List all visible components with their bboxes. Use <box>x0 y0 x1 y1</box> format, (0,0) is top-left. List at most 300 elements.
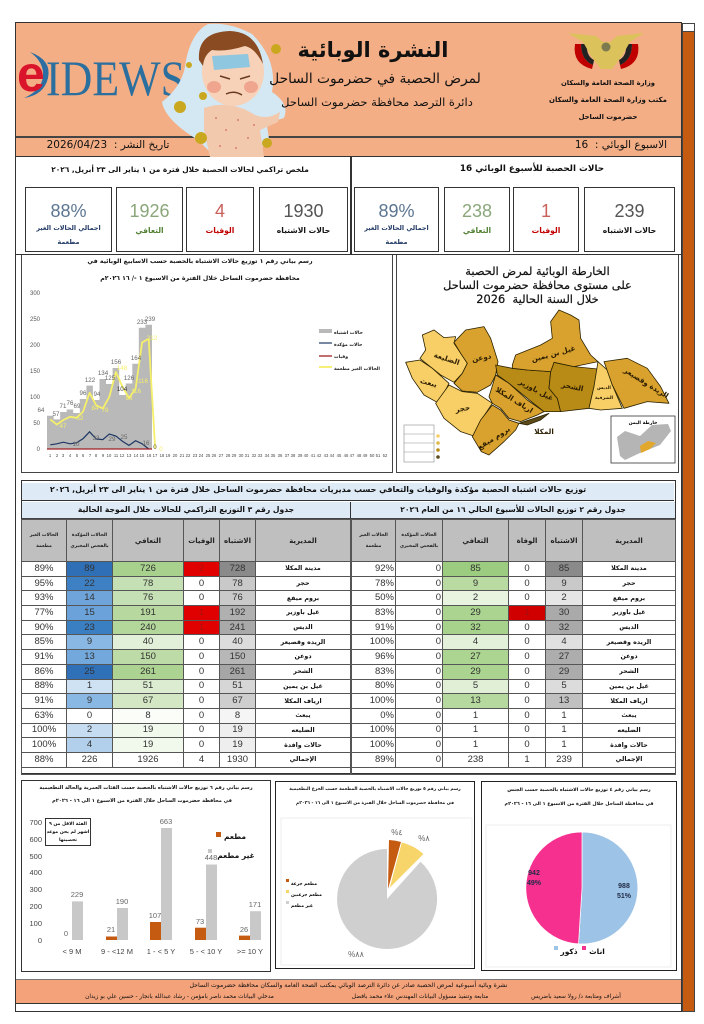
map district labels: غيل بن يمين <box>530 343 577 364</box>
card: cumulative recovered: التعافي <box>135 226 164 235</box>
chart 1 heading line 2: محافظة حضرموت الساحل خلال الفترة من الاسبوع ١ -/ ١٦ ٢٠٢٦م <box>100 275 300 282</box>
table: current week by district: 5 <box>561 680 567 691</box>
line and area chart: 45 <box>337 453 342 458</box>
chart 5 legend: غير مطعم <box>291 904 313 909</box>
table section title <box>22 483 674 501</box>
table: current week by district: 1 <box>561 710 567 721</box>
line and area chart: 71 <box>60 403 67 410</box>
inset map: Yemen <box>610 416 676 464</box>
illustration: sick child <box>162 24 286 157</box>
table: cumulative by district: 93% <box>34 592 54 603</box>
line and area chart: 51 <box>376 453 381 458</box>
table: current week by district: 4 <box>473 636 478 647</box>
table: cumulative by district: 40 <box>232 636 243 647</box>
card: cumulative deaths: 4 <box>215 201 225 221</box>
pie chart: vaccination doses: %٨ <box>418 834 430 843</box>
pie chart: vaccination doses: %٨٨ <box>348 950 365 959</box>
table: current week by district <box>351 519 676 775</box>
chart 6 heading line 1: رسم بياني رقم ٦ توزيع حالات الاشتباه بالحصبة حسب الفئات العمرية والحالة التطعيمية <box>39 785 253 791</box>
table: current week by district: 0 <box>524 666 530 677</box>
line and area chart: 10 <box>107 453 112 458</box>
table: current week by district: 0 <box>524 710 530 721</box>
table: current week by district: الريده وقصيعر <box>607 639 651 646</box>
table: cumulative by district: 4 <box>199 754 204 765</box>
line and area chart: 126 <box>124 375 135 382</box>
table: current week by district: 92% <box>375 563 394 574</box>
map district labels: الديس <box>597 386 611 391</box>
line and area chart: 48 <box>357 453 362 458</box>
card: weekly recovered: التعافي <box>463 226 491 235</box>
legend label unvaccinated: غير مطعم <box>217 851 255 860</box>
bar chart: age groups: 300 <box>29 885 42 894</box>
table: current week by district: 0 <box>436 724 441 735</box>
table: cumulative by district: 15 <box>84 607 95 618</box>
department line: دائرة الترصد محافظة حضرموت الساحل <box>281 95 473 109</box>
table: current week by district: 78% <box>375 578 394 589</box>
divider between summaries <box>350 157 352 255</box>
table: cumulative by district: 78 <box>232 578 243 589</box>
table: current week by district: الوفاة <box>517 536 537 544</box>
bar chart: age groups: 700 <box>29 818 42 827</box>
ministry line 2: مكتب وزارة الصحة العامة والسكان <box>549 96 667 104</box>
table: cumulative by district: 150 <box>230 651 245 662</box>
map legend <box>404 424 440 462</box>
pie chart: gender: 988 <box>618 883 630 890</box>
map district labels: دوعن <box>471 351 492 364</box>
table: current week by district: التعافي <box>462 536 489 544</box>
pie chart: gender: 51% <box>617 893 632 900</box>
table: cumulative by district: 0 <box>199 710 204 721</box>
table: current week by district: 32 <box>470 622 481 633</box>
table: cumulative by district: 8 <box>235 710 240 721</box>
map district labels: المكلا <box>534 427 554 436</box>
bar chart: age groups: 26 <box>240 925 248 934</box>
line and area chart: 17 <box>153 453 158 458</box>
line and area chart: 2 <box>56 453 59 458</box>
card: cumulative recovered <box>116 187 183 252</box>
line and area chart: 200 <box>30 343 41 349</box>
legend swatch unvaccinated <box>208 849 212 853</box>
legend swatch female <box>582 946 586 950</box>
table: cumulative by district: 0 <box>199 636 204 647</box>
table: cumulative by district: 8 <box>145 710 151 721</box>
line and area chart: 33 <box>258 453 263 458</box>
table: current week by district: مدينة المكلا <box>611 565 647 572</box>
map district labels: الريدة وقصيعر <box>621 365 670 400</box>
table: current week by district: 4 <box>561 636 567 647</box>
bar chart: age groups: 400 <box>29 868 42 877</box>
weekly summary heading: حالات الحصبة للأسبوع الوبائي 16 <box>460 164 604 174</box>
table: current week by district: 0 <box>524 592 530 603</box>
table: current week by district: المديرية <box>615 536 643 544</box>
line and area chart: 38 <box>291 453 296 458</box>
table: cumulative by district: 51 <box>143 680 153 691</box>
table: cumulative by district: 226 <box>82 754 97 765</box>
map panel <box>396 255 679 473</box>
table: cumulative by district: 19 <box>143 724 153 735</box>
table: current week by district: 1 <box>473 739 478 750</box>
bar chart: age groups: 73 <box>196 917 204 926</box>
table: cumulative by district: 89% <box>34 563 54 574</box>
pie chart: vaccination doses: %٤ <box>391 828 403 837</box>
line and area chart: 69 <box>74 403 81 410</box>
line and area chart: 52 <box>383 453 388 458</box>
table: cumulative by district: 0 <box>199 578 204 589</box>
table: cumulative by district: 0 <box>199 739 204 750</box>
card: weekly deaths <box>513 187 579 252</box>
chart 6 panel: age and vaccination <box>21 780 271 972</box>
line and area chart: 28 <box>226 453 231 458</box>
table: current week by district: 0 <box>524 651 530 662</box>
line and area chart: 78 <box>102 407 109 414</box>
map district labels: حجر <box>453 403 471 414</box>
card: weekly unvaccinated: 89% <box>378 201 415 221</box>
line and area chart: 19 <box>166 453 171 458</box>
table: cumulative by district: 91% <box>34 695 54 706</box>
chart 1 legend: وفيات <box>334 355 348 360</box>
line and area chart: 32 <box>252 453 257 458</box>
line and area chart: 134 <box>98 370 109 377</box>
footer line 1: نشرة وبائية أسبوعية لمرض الحصبة صادر عن دائرة الترصد الوبائي بمكتب الصحة العامة والسكان محافظة حضرموت الساحل <box>189 982 508 989</box>
table: current week by district: 32 <box>559 622 569 633</box>
table: cumulative by district: غيل باوزير <box>286 609 320 616</box>
table 3 caption: جدول رقم ٣ التوزيع التراكمي للحالات خلال الموجة الحالية <box>78 505 294 514</box>
footer credit: data entry: مدخلي البيانات محمد ناصر بامؤمن - رشاد عبدالله بانجار - حسين علي بو زيدان <box>85 994 274 1000</box>
table: current week by district: الضليعه <box>617 727 641 734</box>
table: cumulative by district: 23 <box>84 622 95 633</box>
chart 1 legend: حالات اشتباه <box>334 331 363 336</box>
map district labels: الشحر <box>560 380 584 393</box>
table: cumulative by district: 88% <box>34 680 54 691</box>
line and area chart: 36 <box>278 453 283 458</box>
line and area chart: 18 <box>160 453 165 458</box>
table: current week by district: 1 <box>524 607 530 618</box>
table: cumulative by district <box>21 519 351 775</box>
legend label male: ذكور <box>560 947 578 956</box>
table: current week by district: 96% <box>375 651 394 662</box>
note text: الفئة الاقل من ٩ اشهر لم يحن موعد تحصينها <box>47 822 89 843</box>
table: current week by district: 83% <box>375 666 394 677</box>
table: current week by district: 1 <box>524 754 530 765</box>
table: cumulative by district: التعافي <box>135 536 161 544</box>
line and area chart: 100 <box>30 395 41 401</box>
table: cumulative by district: 0 <box>199 680 204 691</box>
line and area chart: 76 <box>67 400 74 407</box>
line and area chart: 94 <box>94 391 101 398</box>
line and area chart: 0 <box>159 446 163 453</box>
chart 6 legend <box>208 832 255 860</box>
table: cumulative by district: 63% <box>34 710 54 721</box>
bar chart: age groups: 100 <box>29 919 42 928</box>
table: current week by district: غيل باوزير <box>612 609 646 616</box>
table: cumulative by district: 51 <box>232 680 243 691</box>
table: current week by district: 91% <box>375 622 394 633</box>
table: current week by district: 0 <box>436 710 441 721</box>
table: current week by district: الاشتباه <box>550 536 577 544</box>
map heading line 1: الخارطة الوبائية لمرض الحصبة <box>465 264 610 278</box>
legend swatch male <box>554 946 558 950</box>
line and area chart: 37 <box>285 453 290 458</box>
table: cumulative by district: 150 <box>140 651 156 662</box>
table: cumulative by district: 91% <box>34 651 54 662</box>
table: current week by district: الحالات الغير مطعمة <box>359 532 388 548</box>
line and area chart: 22 <box>186 453 191 458</box>
table: cumulative by district: الحالات الغير مطعمة <box>30 532 58 548</box>
line and area chart: 47 <box>350 453 355 458</box>
line and area chart: 24 <box>199 453 204 458</box>
table: current week by district: 9 <box>561 578 567 589</box>
line and area chart: 4 <box>69 453 72 458</box>
line and area chart: 47 <box>60 423 67 430</box>
ministry line 1: وزارة الصحة العامة والسكان <box>561 79 655 87</box>
table: cumulative by district: 191 <box>140 607 156 618</box>
legend swatch vaccinated <box>216 832 221 837</box>
footer band <box>16 979 681 1004</box>
table: current week by district: 89% <box>375 754 394 765</box>
table: current week by district: 0 <box>436 754 441 765</box>
card: cumulative suspected <box>259 187 348 252</box>
line and area chart: 6 <box>82 453 85 458</box>
table: current week by district: 13 <box>470 695 481 706</box>
map district labels: الشرقية <box>595 396 614 401</box>
table: current week by district: 100% <box>370 739 394 750</box>
table: cumulative by district: 19 <box>143 739 153 750</box>
card: weekly deaths: 1 <box>541 201 551 221</box>
line and area chart: 43 <box>324 453 329 458</box>
table: current week by district: 0 <box>436 622 441 633</box>
table: cumulative by district: 13 <box>84 651 95 662</box>
pie chart: gender: 942 <box>528 870 540 877</box>
table: cumulative by district: 40 <box>143 636 153 647</box>
table: current week by district: 29 <box>470 607 481 618</box>
line and area chart: 20 <box>173 453 178 458</box>
bar chart: age groups: 190 <box>116 897 128 906</box>
table: cumulative by district: 241 <box>230 622 245 633</box>
map district labels: ارياف المكلا <box>494 385 535 415</box>
chart 5 heading line 1: رسم بياني رقم ٥ توزيع حالات الاشتباه بالحصبة المطعمة حسب الجرع التطعيمية <box>289 787 461 792</box>
table: current week by district: 0 <box>436 592 441 603</box>
bar chart: age groups: >= 10 Y <box>237 947 263 956</box>
table section frame <box>21 480 676 774</box>
table: cumulative by district: 9 <box>87 636 92 647</box>
table: cumulative by district: بروم ميفع <box>287 595 319 602</box>
table: current week by district: 0 <box>524 636 530 647</box>
table: current week by district: 1 <box>561 739 567 750</box>
line and area chart: 10 <box>73 441 80 448</box>
line and area chart: 0 <box>37 447 41 453</box>
table: current week by district: 1 <box>473 710 478 721</box>
table: cumulative by district: حالات وافدة <box>284 742 322 749</box>
table: cumulative by district: 0 <box>87 710 92 721</box>
chart 5 panel: vaccination doses <box>275 781 475 969</box>
line and area chart: 16 <box>143 440 150 447</box>
table: current week by district: ارياف المكلا <box>610 698 648 705</box>
map district labels: الضليعة <box>433 350 461 367</box>
table: cumulative by district: الإجمالي <box>290 756 316 763</box>
line and area chart: 14 <box>134 453 139 458</box>
map district labels <box>419 343 670 451</box>
footer credit: supervision: أشراف ومتابعة د/ رولا سعيد باضريس <box>531 994 621 1000</box>
table: cumulative by district: 100% <box>32 739 56 750</box>
map district labels: بروم ميفع <box>476 424 512 451</box>
line and area chart: 84 <box>92 405 99 412</box>
logo: eIDEWS: e <box>17 46 45 102</box>
inset map: Yemen: خارطة اليمن <box>629 421 657 426</box>
table: current week by district: 0 <box>436 563 441 574</box>
table section heading text: توزيع حالات اشتباه الحصبة مؤكدة والوفيات والتعافي حسب مديريات محافظة حضرموت الساحل خلال فترة من ١ يناير الى ٢٣ أبريل, ٢٠٢٦ <box>50 485 586 494</box>
bar chart: age groups: 0 <box>38 936 42 945</box>
table: cumulative by district: 726 <box>140 563 156 574</box>
table: current week by district: الإجمالي <box>616 756 642 763</box>
line and area chart: 30 <box>239 453 244 458</box>
table: cumulative by district: 1930 <box>227 754 248 765</box>
card: weekly suspected <box>584 187 675 252</box>
table: current week by district: 0 <box>436 651 441 662</box>
table: current week by district: الشحر <box>619 668 639 675</box>
table: cumulative by district: 0 <box>199 592 204 603</box>
table: cumulative by district: مدينة المكلا <box>285 565 321 572</box>
table 2 caption: جدول رقم ٢ توزيع الحالات للأسبوع الحالي ١٦ من العام ٢٠٢٦ <box>400 505 626 514</box>
table: cumulative by district: 1 <box>199 607 204 618</box>
table: current week by district: 85 <box>470 563 481 574</box>
table: current week by district: 0 <box>524 739 530 750</box>
pie chart: gender: 49% <box>527 880 542 887</box>
line and area chart: 49 <box>363 453 368 458</box>
map heading line 3: خلال السنة الحالية 2026 <box>476 292 599 306</box>
table: cumulative by district: المديرية <box>289 536 317 544</box>
table: current week by district: 0 <box>524 578 530 589</box>
table: cumulative by district: 85% <box>34 636 54 647</box>
card: weekly suspected: 239 <box>614 201 645 221</box>
table: current week by district: 0 <box>524 724 530 735</box>
line and area chart: 42 <box>317 453 322 458</box>
table: cumulative by district: 86% <box>34 666 54 677</box>
line and area chart: 16 <box>147 453 152 458</box>
table: cumulative by district: الريده وقصيعر <box>281 639 325 646</box>
table: cumulative by district: 19 <box>232 739 243 750</box>
table: cumulative by district: حجر <box>296 580 310 587</box>
bar chart: age groups: 0 <box>64 929 68 938</box>
table: current week by district: 100% <box>370 724 394 735</box>
table: current week by district: غيل بن يمين <box>609 683 649 690</box>
table: cumulative by district: 0 <box>199 666 204 677</box>
bar chart: age groups: 500 <box>29 852 42 861</box>
card: cumulative unvaccinated <box>25 187 112 252</box>
bar chart: age groups: 21 <box>107 925 115 934</box>
strip top white cap <box>682 23 695 32</box>
line and area chart: 156 <box>111 359 122 366</box>
table: cumulative by district: 1 <box>87 680 92 691</box>
table: cumulative by district: الاشتباه <box>224 536 251 544</box>
line and area chart: 104 <box>117 386 128 393</box>
chart 4 heading line 2: في محافظة الساحل خلال الفترة من الاسبوع ١ الى ١٦ - ٢٠٢٦م <box>505 802 653 807</box>
card: cumulative deaths <box>186 187 254 252</box>
line and area chart: 13 <box>127 453 132 458</box>
table: current week by district: 30 <box>559 607 569 618</box>
table: current week by district: 0 <box>436 607 441 618</box>
line and area chart: 21 <box>180 453 185 458</box>
line and area chart: 26 <box>212 453 217 458</box>
line and area chart: 33 <box>93 435 100 442</box>
table: current week by district: 0 <box>436 695 441 706</box>
line and area chart: 0 <box>153 444 157 451</box>
card: cumulative unvaccinated: 88% <box>50 201 87 221</box>
line and area chart: 23 <box>193 453 198 458</box>
line and area chart: 34 <box>265 453 270 458</box>
line and area chart: 29 <box>232 453 237 458</box>
line and area chart: 7 <box>89 453 92 458</box>
table: cumulative by district: 100% <box>32 724 56 735</box>
table: current week by district: 27 <box>559 651 569 662</box>
line and area chart: 3 <box>62 453 65 458</box>
line and area chart: 122 <box>85 377 96 384</box>
card: weekly deaths: الوفيات <box>532 226 560 235</box>
table: current week by district: يبعث <box>621 712 637 719</box>
table: cumulative by district: الوفيات <box>188 536 215 544</box>
line and area chart: 1 <box>49 453 52 458</box>
ministry line 3: حضرموت الساحل <box>579 113 637 121</box>
table: current week by district: 1 <box>561 724 567 735</box>
card: weekly unvaccinated <box>354 187 439 252</box>
table: current week by district: 0 <box>524 680 530 691</box>
panel: weekly and cumulative summary <box>16 157 681 255</box>
line and area chart: 44 <box>330 453 335 458</box>
table: cumulative by district: الديس <box>293 624 313 631</box>
table: current week by district: 50% <box>375 592 394 603</box>
bar chart: age groups: 5 - < 10 Y <box>190 947 222 956</box>
bar chart: age groups: 200 <box>29 902 42 911</box>
bar chart: age groups: 448 <box>205 853 217 862</box>
line and area chart: 239 <box>145 316 156 323</box>
table: current week by district: دوعن <box>620 653 638 660</box>
line and area chart: 27 <box>219 453 224 458</box>
line and area chart: 116 <box>131 388 141 395</box>
table: cumulative by district: 22 <box>84 578 95 589</box>
table: current week by district: 239 <box>556 754 572 765</box>
table: current week by district: 80% <box>375 680 394 691</box>
footer credit: follow up: متابعة وتنفيذ مسؤول البيانات المهندس علاء محمد بافضل <box>352 994 488 1000</box>
chart 4 panel: gender <box>481 781 677 971</box>
line and area chart: 46 <box>344 453 349 458</box>
card: cumulative deaths: الوفيات <box>206 226 234 235</box>
table: current week by district: 0 <box>524 622 530 633</box>
chart 4 heading line 1: رسم بياني رقم ٤ توزيع حالات الاشتباه بالحصبة حسب الجنس <box>507 788 651 793</box>
table: cumulative by district: 67 <box>232 695 243 706</box>
table: cumulative by district: يبعث <box>295 712 311 719</box>
table: cumulative by district: 728 <box>230 563 245 574</box>
table: current week by district: حجر <box>622 580 636 587</box>
table: current week by district: 85 <box>559 563 569 574</box>
table: cumulative by district: 2 <box>199 563 204 574</box>
chart 1 legend <box>319 329 380 372</box>
line and area chart: 25 <box>121 434 128 441</box>
map heading <box>443 264 632 306</box>
table: current week by district: 9 <box>473 578 478 589</box>
bar chart: age groups: < 9 M <box>63 947 81 956</box>
header band <box>16 23 681 157</box>
chart 5 heading line 2: في محافظة حضرموت الساحل خلال الفترة من الاسبوع ١ الى ١٦ - ٢٠٢٦م <box>296 801 454 806</box>
table: cumulative by district: 261 <box>230 666 245 677</box>
line and area chart: 41 <box>311 453 316 458</box>
chart 1 heading line 1: رسم بياني رقم ١ توزيع حالات الاشتباه بالحصبة حسب الاسابيع الوبائية في <box>87 258 313 265</box>
chart 1 heading <box>87 258 313 282</box>
table: cumulative by district: الضليعه <box>291 727 315 734</box>
emblem: republic eagle <box>568 33 644 69</box>
table: current week by district: 5 <box>473 680 478 691</box>
table: cumulative by district: 19 <box>232 724 243 735</box>
table: current week by district: 0% <box>380 710 394 721</box>
logo: eIDEWS: IDEWS <box>46 50 185 106</box>
